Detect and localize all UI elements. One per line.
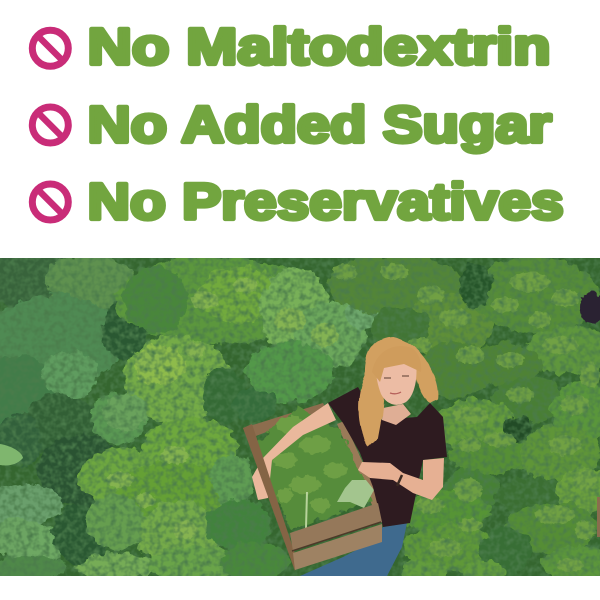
kale plants: leafy left side [0,252,149,580]
eyes and mouth [384,376,409,394]
crate left rail [243,424,297,571]
pale leaf on far left [0,444,23,465]
right arm [358,458,444,500]
neck and collar [382,404,411,425]
text: No Maltodextrin: No Maltodextrin [88,18,551,75]
icon: prohibition sign [32,30,68,66]
small curly kale lumps [333,264,600,572]
dark kale corner [580,292,600,324]
small leafy highlights [106,277,339,539]
icon: prohibition sign [32,107,68,143]
pale kale leaf in crate [337,480,374,508]
hair [359,337,438,447]
claims list [32,18,564,230]
photo: woman holding crate of kale in a kale field [0,252,600,584]
claim: no added sugar [32,96,552,153]
kale plants: bright centre [77,256,378,583]
text: No Preservatives: No Preservatives [88,173,564,230]
crate back and left rails [243,403,382,505]
crate front boards [290,503,382,570]
bracelet [397,475,402,486]
left arm [252,403,336,500]
crate edge at right [597,497,600,537]
jeans [300,523,407,576]
face [376,364,416,405]
leaf texture overlay [0,258,600,576]
claim: no maltodextrin [32,18,551,75]
icon: prohibition sign [32,184,68,220]
woman with crate [243,337,447,576]
claim: no preservatives [32,173,564,230]
shirt [328,387,447,527]
fringe [376,360,416,382]
text: No Added Sugar: No Added Sugar [88,96,552,153]
kale inside crate [256,404,372,532]
curly kale plants: right side [327,255,600,584]
